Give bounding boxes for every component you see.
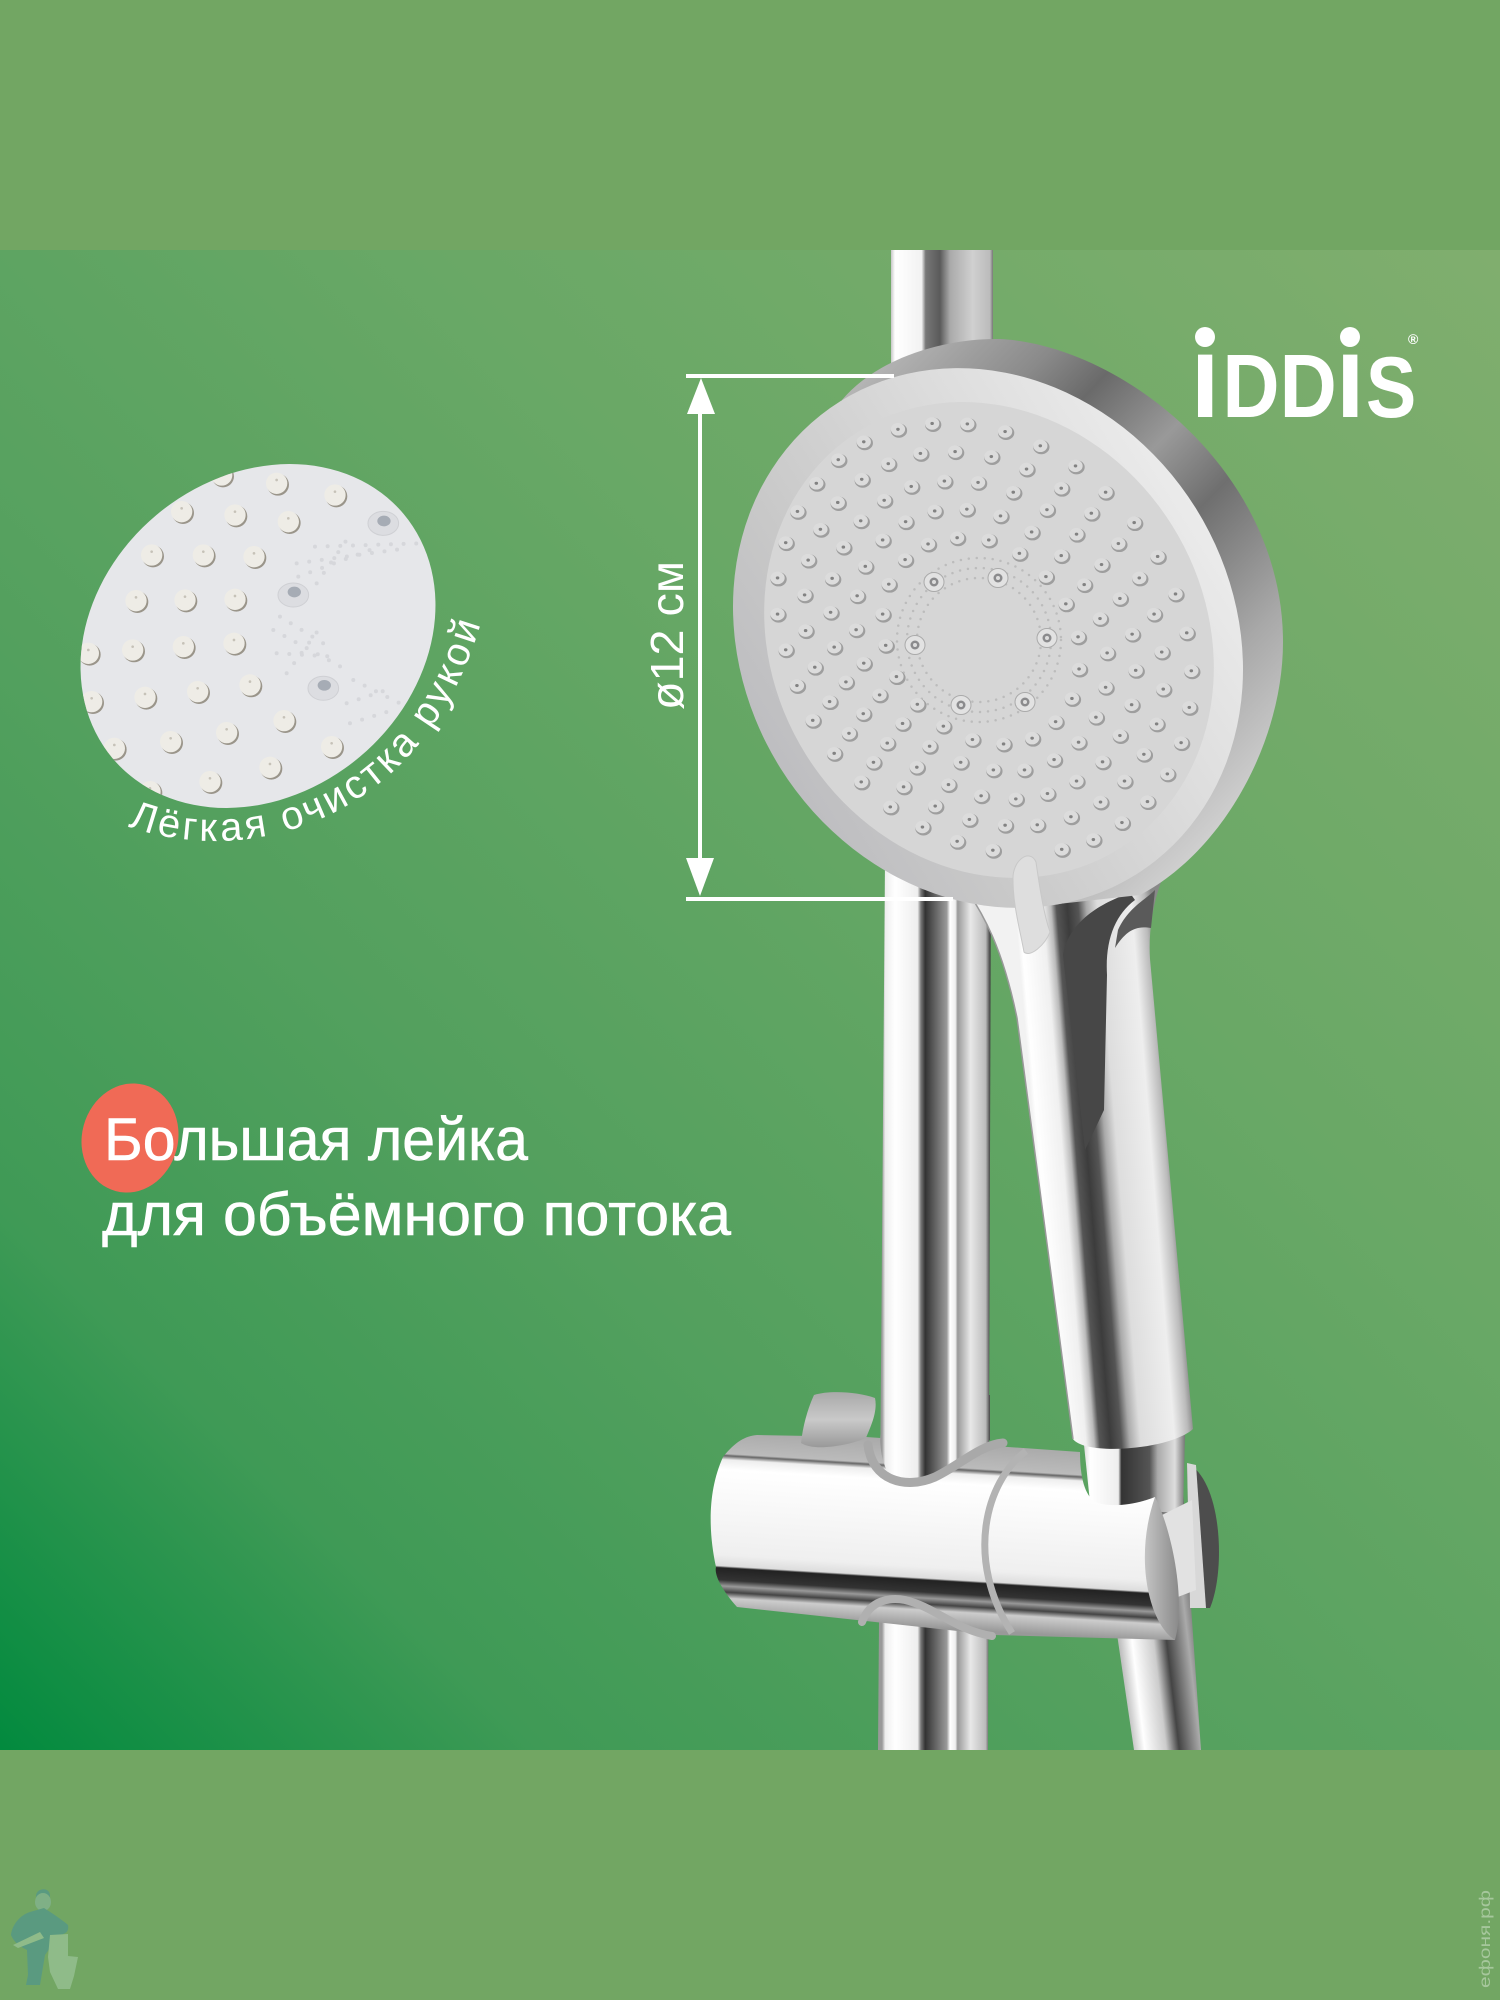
clamp knob (801, 1392, 876, 1447)
central gradient panel (0, 250, 1500, 1750)
dimension arrow (686, 376, 953, 899)
headline: для объёмного потока (102, 1181, 732, 1248)
micro dots (273, 540, 422, 723)
logo: D (1280, 335, 1337, 436)
large nozzles (278, 511, 399, 700)
inset: nozzle close-up (80, 464, 436, 808)
clamp end cap (1145, 1497, 1179, 1640)
shower head face (632, 272, 1344, 1004)
shower handle (960, 862, 1193, 1449)
upper saddle (868, 1443, 1003, 1482)
red accent ellipse (69, 1072, 191, 1204)
handle tab over head (1013, 856, 1050, 954)
outer ring (632, 272, 1344, 1004)
inner plate (675, 317, 1303, 963)
lower saddle (862, 1599, 992, 1636)
clamp rear plate (1162, 1463, 1219, 1608)
curved caption: Лёгкая очистка рукой (128, 618, 480, 842)
shower rail (878, 250, 993, 1750)
shower head chrome rim (842, 339, 1283, 906)
logo: ® (1408, 331, 1419, 347)
logo: i (1336, 310, 1365, 442)
large nozzles (905, 568, 1057, 714)
rail above clamp (880, 1395, 990, 1482)
dimension label: ø12 см (641, 561, 693, 710)
logo: D (1222, 335, 1280, 436)
watermark: site name: ефоня.рф (1477, 1890, 1494, 1988)
bottom band (0, 1750, 1500, 2000)
micro dot rings (897, 558, 1061, 722)
nozzle rows (90, 476, 336, 793)
logo: i (1191, 310, 1220, 442)
headline: Большая лейка (104, 1106, 529, 1173)
clamp grey ring (985, 1451, 1026, 1633)
nozzles (778, 423, 1192, 852)
logo: S (1366, 341, 1416, 436)
headline (102, 1106, 732, 1248)
neck above clamp (1084, 1435, 1185, 1512)
top band (0, 0, 1500, 250)
logo (1191, 310, 1419, 442)
logo round i dots (1195, 327, 1360, 347)
hose (1100, 1490, 1201, 1750)
watermark: plumber (11, 1889, 78, 1989)
slider clamp body (711, 1435, 1179, 1640)
